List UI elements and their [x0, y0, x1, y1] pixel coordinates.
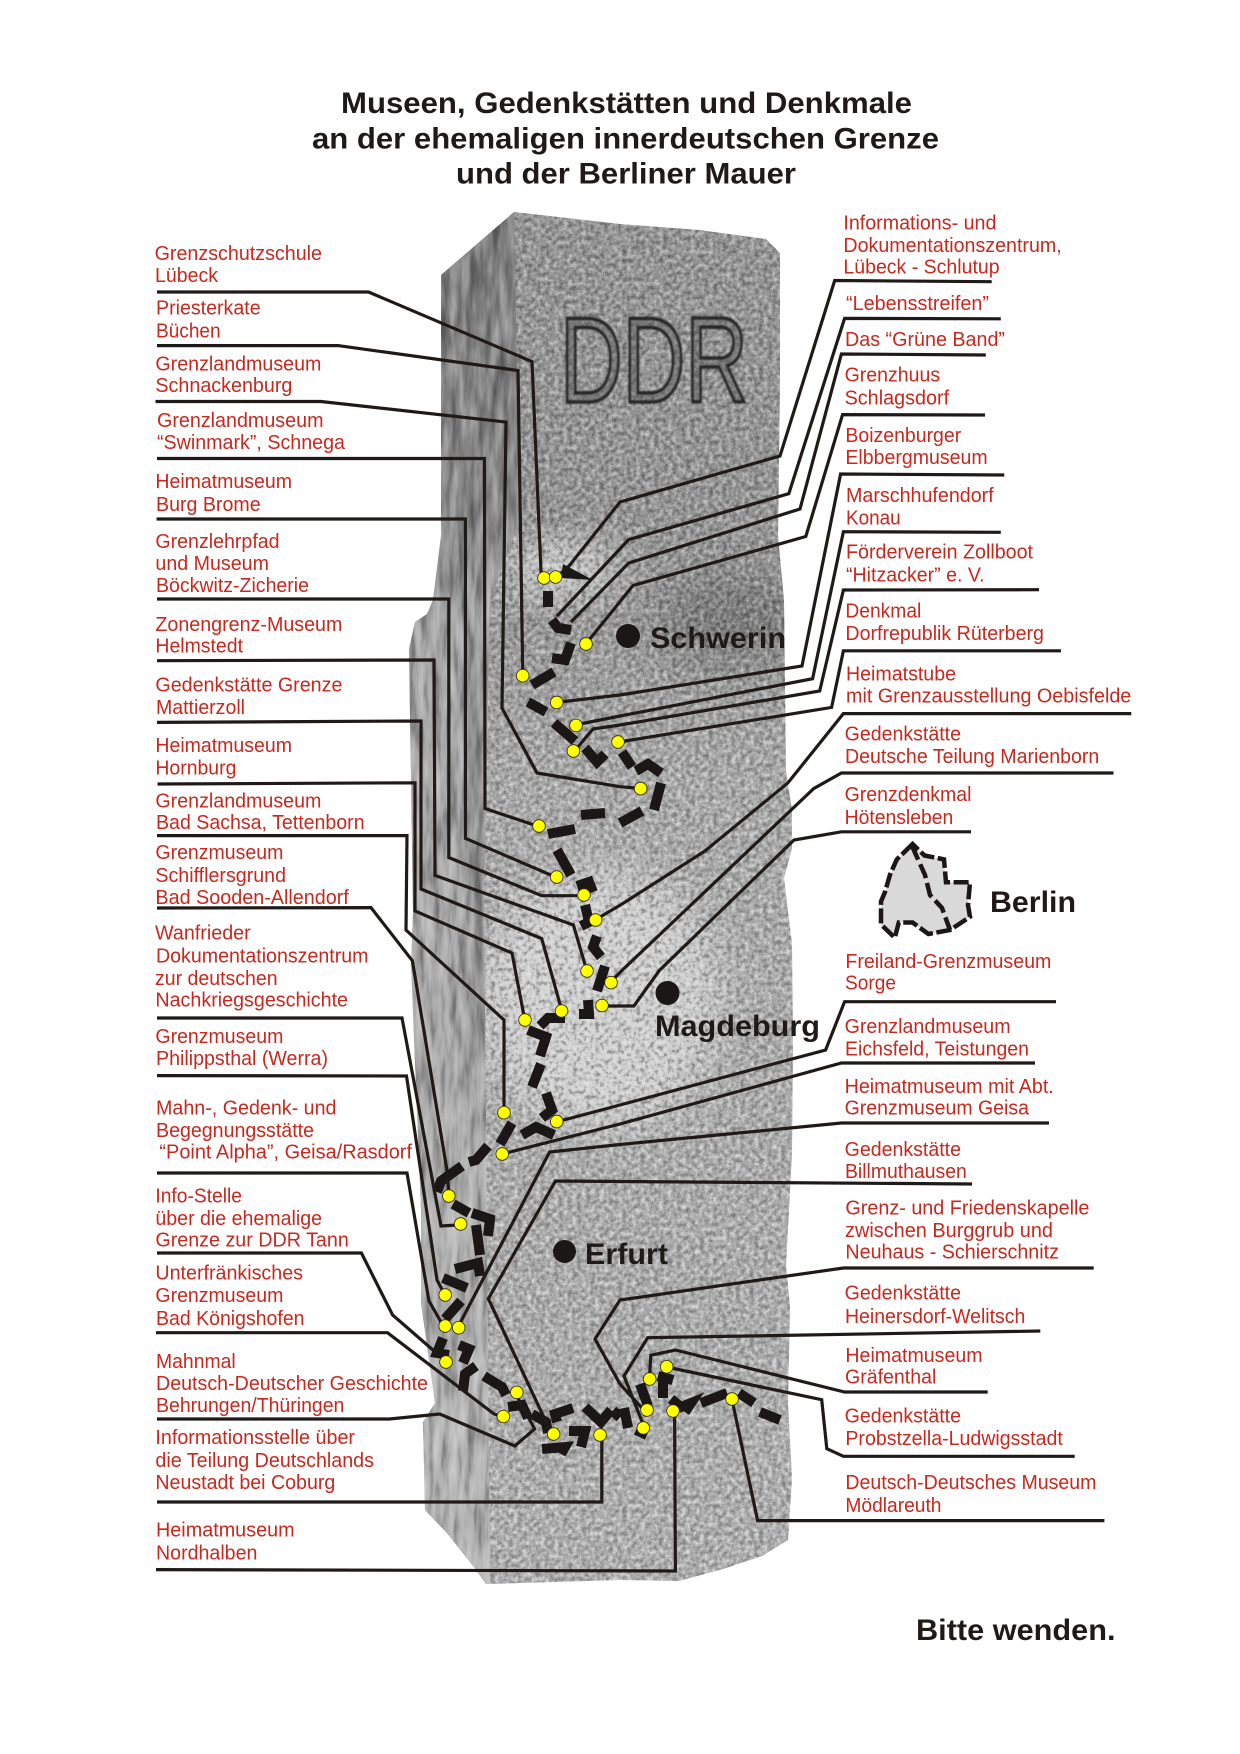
callout: Heimatmuseum Burg Brome: Heimatmuseum: [155, 471, 292, 493]
callout: Grenzhuus Schlagsdorf: Schlagsdorf: [845, 388, 950, 410]
callout: Heimatmuseum Gräfenthal: Gräfenthal: [845, 1367, 936, 1389]
callout: Grenzschutzschule Lübeck: Grenzschutzschule: [155, 243, 322, 265]
callout: Info-Stelle Tann: Info-Stelle: [155, 1186, 242, 1208]
callout: Heimatmuseum Hornburg: Hornburg: [155, 757, 236, 779]
callout: Wanfrieder Dokumentationszentrum: Wanfrieder: [155, 923, 251, 945]
callout: Mahnmal Behrungen: Behrungen/Thüringen: [156, 1395, 344, 1417]
callout: Heimatmuseum Hornburg: [155, 735, 531, 1026]
callout: Gedenkstätte Grenze Mattierzoll: Mattierzoll: [156, 697, 245, 719]
callout: Grenz- und Friedenskapelle: zwischen Burggrub und: [845, 1220, 1053, 1242]
callout: Info-Stelle Tann: Grenze zur DDR Tann: [155, 1230, 349, 1252]
callout: Heimatmuseum Gräfenthal: Heimatmuseum: [845, 1345, 983, 1367]
callout: Priesterkate Büchen: Priesterkate: [156, 298, 261, 320]
callout: Unterfränkisches Grenzmuseum: Unterfränkisches: [155, 1262, 303, 1284]
callout: Heimatmuseum Gräfenthal: [643, 1345, 988, 1392]
callout: Grenzlandmuseum Swinmark Schnega: [157, 410, 545, 832]
callout: Heimatstube Oebisfelde: [589, 664, 1131, 926]
callout: Gedenkstätte Billmuthausen: [488, 1139, 972, 1440]
callout: Lebensstreifen: “Lebensstreifen”: [846, 293, 989, 315]
dashed former border line: [437, 564, 780, 1454]
callout: Informations- und Dokumentationszentrum Schlutup: Informations- und: [843, 213, 996, 235]
callout: Grenzschutzschule Lübeck: [155, 243, 550, 584]
callout: Zonengrenz-Museum Helmstedt: Helmstedt: [155, 636, 243, 658]
callout: Gedenkstätte Heinersdorf-Welitsch: Heinersdorf-Welitsch: [845, 1306, 1025, 1328]
callout: Point Alpha, Geisa/Rasdorf: [156, 1098, 452, 1332]
callout: Gedenkstätte Deutsche Teilung Marienborn: Deutsche Teilung Marienborn: [845, 746, 1099, 768]
callout: Grenzlandmuseum Swinmark Schnega: “Swinmark”, Schnega: [157, 432, 346, 454]
callout: Heimatmuseum Burg Brome: Burg Brome: [156, 494, 261, 516]
callout: Heimatmuseum Grenzmuseum Geisa: [452, 1076, 1054, 1334]
callout: Informations- und Dokumentationszentrum Schlutup: Dokumentationszentrum,: [843, 235, 1062, 257]
callout: Point Alpha, Geisa/Rasdorf: Begegnungsstätte: [156, 1120, 314, 1142]
callout: Das Grüne Band: Das “Grüne Band”: [845, 329, 1005, 351]
callout: Grenzlandmuseum Schnackenburg: Grenzlandmuseum: [155, 354, 321, 376]
callout: Wanfrieder Dokumentationszentrum: zur deutschen: [155, 968, 278, 990]
callout: Informationsstelle Neustadt bei Coburg: [155, 1427, 606, 1502]
callout: Heimatmuseum Hornburg: Heimatmuseum: [155, 735, 292, 757]
callout: Grenzlandmuseum Eichsfeld, Teistungen: [496, 1016, 1035, 1160]
callout: Boizenburger Elbbergmuseum: [550, 425, 1004, 709]
callout: Heimatmuseum Grenzmuseum Geisa: Heimatmuseum mit Abt.: [845, 1076, 1054, 1098]
callout: Lebensstreifen: [557, 293, 1001, 616]
callout: Grenzlehrpfad und Museum Böckwitz-Zicherie: [155, 531, 590, 901]
callout: Grenzhuus Schlagsdorf: [580, 364, 985, 650]
inset: Berlin: Berlin: [990, 886, 1076, 919]
callout: Deutsch-Deutsches Museum Mödlareuth: Mödlareuth: [845, 1495, 942, 1517]
callout: Grenzlandmuseum Bad Sachsa, Tettenborn: [155, 791, 510, 1119]
callout: Grenzmuseum Schifflersgrund Bad Sooden-Allendorf: [155, 842, 455, 1202]
callout: Grenzlehrpfad und Museum Böckwitz-Zicherie: Grenzlehrpfad: [155, 531, 280, 553]
callout: Unterfränkisches Grenzmuseum: Grenzmuseum: [155, 1285, 283, 1307]
callout: Heimatmuseum Nordhalben: Nordhalben: [156, 1543, 257, 1565]
callout: Grenzdenkmal Hötensleben: Grenzdenkmal: [845, 784, 972, 806]
city: Magdeburg: Magdeburg: [655, 1010, 820, 1043]
callout: Grenzschutzschule Lübeck: Lübeck: [155, 265, 219, 287]
callout: Mahnmal Behrungen: Deutsch-Deutscher Geschichte: [156, 1373, 428, 1395]
callout: Marschhufendorf Konau: [570, 485, 1001, 732]
callout: Informations- und Dokumentationszentrum Schlutup: Lübeck - Schlutup: [843, 257, 1000, 279]
city: Erfurt: Erfurt: [585, 1238, 668, 1271]
callout: Point Alpha, Geisa/Rasdorf: Mahn-, Gedenk- und: [156, 1098, 336, 1120]
border stone illustration: [400, 205, 800, 1590]
footer note: Bitte wenden.: [916, 1614, 1116, 1647]
callout: Heimatstube Oebisfelde: mit Grenzausstellung Oebisfelde: [846, 686, 1131, 708]
callout: Gedenkstätte Billmuthausen: Gedenkstätte: [845, 1139, 961, 1161]
callout: Grenzmuseum Schifflersgrund Bad Sooden-Allendorf: Bad Sooden-Allendorf: [155, 887, 349, 909]
callout: Grenzlehrpfad und Museum Böckwitz-Zicherie: und Museum: [155, 553, 269, 575]
callout: Wanfrieder Dokumentationszentrum: Nachkriegsgeschichte: [155, 990, 348, 1012]
callout: Gedenkstätte Probstzella-Ludwigsstadt: [660, 1360, 1075, 1456]
callout: Grenzlandmuseum Eichsfeld, Teistungen: Grenzlandmuseum: [845, 1016, 1011, 1038]
callout: Heimatmuseum Nordhalben: [156, 1405, 679, 1571]
title: Museen, Gedenkstätten und Denkmale: [341, 87, 912, 120]
engraved DDR lettering: DDR: [560, 292, 748, 428]
callout: Grenzmuseum Schifflersgrund Bad Sooden-Allendorf: Schifflersgrund: [155, 865, 286, 887]
callout: Wanfrieder Dokumentationszentrum: [155, 923, 467, 1230]
callout: Heimatmuseum Grenzmuseum Geisa: Grenzmuseum Geisa: [845, 1098, 1030, 1120]
title: [312, 87, 939, 190]
callout: Unterfränkisches Grenzmuseum: Bad Königshofen: [156, 1308, 304, 1330]
callout: Deutsch-Deutsches Museum Mödlareuth: [726, 1393, 1104, 1521]
callout: Freiland-Grenzmuseum Sorge: [550, 951, 1056, 1128]
callout: Boizenburger Elbbergmuseum: Elbbergmuseum: [845, 447, 988, 469]
callout: Förderverein Zollboot Hitzacker: Förderverein Zollboot: [846, 542, 1033, 564]
callout: Grenzlandmuseum Schnackenburg: [155, 354, 647, 795]
callout: Grenzlandmuseum Bad Sachsa, Tettenborn: Bad Sachsa, Tettenborn: [156, 812, 365, 834]
callout: Grenzlandmuseum Schnackenburg: Schnackenburg: [155, 375, 292, 397]
city: Schwerin: Schwerin: [650, 622, 786, 655]
callout: Mahnmal Behrungen: Mahnmal: [156, 1351, 236, 1373]
callout: Unterfränkisches Grenzmuseum: [155, 1262, 510, 1423]
callout: Gedenkstätte Probstzella-Ludwigsstadt: Gedenkstätte: [845, 1406, 961, 1428]
callout: Deutsch-Deutsches Museum Mödlareuth: Deutsch-Deutsches Museum: [845, 1472, 1096, 1494]
callout: Grenzmuseum Philippsthal (Werra): Grenzmuseum: [155, 1026, 283, 1048]
callout: Grenz- und Friedenskapelle: Neuhaus - Schierschnitz: [845, 1242, 1059, 1264]
callout: Info-Stelle Tann: [155, 1186, 452, 1368]
callout: Informationsstelle Neustadt bei Coburg: Neustadt bei Coburg: [155, 1472, 335, 1494]
title: an der ehemaligen innerdeutschen Grenze: [312, 122, 939, 156]
callout: Gedenkstätte Deutsche Teilung Marienborn: Gedenkstätte: [845, 724, 961, 746]
callout: Grenzlehrpfad und Museum Böckwitz-Zicherie: Böckwitz-Zicherie: [156, 575, 309, 597]
callout: Grenzdenkmal Hötensleben: [596, 784, 972, 1012]
callout: Informationsstelle Neustadt bei Coburg: die Teilung Deutschlands: [155, 1450, 374, 1472]
callout: Info-Stelle Tann: über die ehemalige: [155, 1208, 322, 1230]
callout: Marschhufendorf Konau: Konau: [846, 507, 901, 529]
title: und der Berliner Mauer: [456, 158, 796, 190]
callout: Mahnmal Behrungen: [156, 1351, 535, 1446]
callout: Boizenburger Elbbergmuseum: Boizenburger: [845, 425, 962, 447]
callout: Priesterkate Büchen: Büchen: [156, 320, 221, 342]
callout: Informationsstelle Neustadt bei Coburg: Informationsstelle über: [155, 1427, 355, 1449]
callout: Grenzlandmuseum Eichsfeld, Teistungen: Eichsfeld, Teistungen: [845, 1038, 1029, 1060]
callout: Marschhufendorf Konau: Marschhufendorf: [846, 485, 994, 507]
callout: Grenzmuseum Schifflersgrund Bad Sooden-Allendorf: Grenzmuseum: [155, 842, 283, 864]
callout: Gedenkstätte Grenze Mattierzoll: [155, 675, 568, 1017]
callout: Denkmal Dorfrepublik Rüterberg: [612, 600, 1061, 748]
callout: Denkmal Dorfrepublik Rüterberg: Dorfrepublik Rüterberg: [845, 623, 1044, 645]
callout: Gedenkstätte Heinersdorf-Welitsch: Gedenkstätte: [845, 1282, 961, 1304]
callout: Grenzmuseum Philippsthal (Werra): Philippsthal (Werra): [156, 1048, 328, 1070]
callout: Zonengrenz-Museum Helmstedt: Zonengrenz-Museum: [155, 614, 342, 636]
callout: Gedenkstätte Probstzella-Ludwigsstadt: Probstzella-Ludwigsstadt: [845, 1428, 1063, 1450]
callout: Förderverein Zollboot Hitzacker: “Hitzacker” e. V.: [846, 565, 985, 587]
callout: Freiland-Grenzmuseum Sorge: Sorge: [845, 972, 896, 994]
callout: Heimatmuseum Nordhalben: Heimatmuseum: [156, 1520, 295, 1542]
callout: Grenzmuseum Philippsthal (Werra): [155, 1026, 452, 1301]
callout: Gedenkstätte Grenze Mattierzoll: Gedenkstätte Grenze: [155, 675, 342, 697]
callout: Point Alpha, Geisa/Rasdorf: “Point Alpha”, Geisa/Rasdorf: [159, 1142, 412, 1164]
inset: Berlin: [881, 844, 1076, 938]
callout: Das Grüne Band: [571, 329, 1005, 622]
callout: Grenzlandmuseum Swinmark Schnega: Grenzlandmuseum: [157, 410, 324, 432]
callout: Heimatstube Oebisfelde: Heimatstube: [846, 664, 956, 686]
callout: Grenzdenkmal Hötensleben: Hötensleben: [845, 807, 953, 829]
city: Magdeburg: [655, 981, 820, 1043]
callout: Förderverein Zollboot Hitzacker: [567, 542, 1039, 757]
callout: Grenzhuus Schlagsdorf: Grenzhuus: [845, 364, 940, 386]
callout: Wanfrieder Dokumentationszentrum: Dokumentationszentrum: [156, 946, 368, 968]
callout: Grenz- und Friedenskapelle: Grenz- und Friedenskapelle: [845, 1198, 1089, 1220]
callout: Zonengrenz-Museum Helmstedt: [155, 614, 593, 977]
callout: Heimatmuseum Burg Brome: [155, 471, 563, 883]
callout: Freiland-Grenzmuseum Sorge: Freiland-Grenzmuseum: [845, 951, 1051, 973]
callout: Priesterkate Büchen: [156, 298, 529, 682]
callout: Gedenkstätte Billmuthausen: Billmuthausen: [845, 1161, 967, 1183]
callout: Informations- und Dokumentationszentrum Schlutup: [549, 213, 1062, 583]
callout: Grenzlandmuseum Bad Sachsa, Tettenborn: Grenzlandmuseum: [155, 791, 321, 813]
callout: Gedenkstätte Heinersdorf-Welitsch: [624, 1282, 1040, 1434]
callout: Grenz- und Friedenskapelle: [595, 1198, 1094, 1416]
callout: Gedenkstätte Deutsche Teilung Marienborn: [605, 724, 1114, 989]
callout: Denkmal Dorfrepublik Rüterberg: Denkmal: [845, 600, 921, 622]
